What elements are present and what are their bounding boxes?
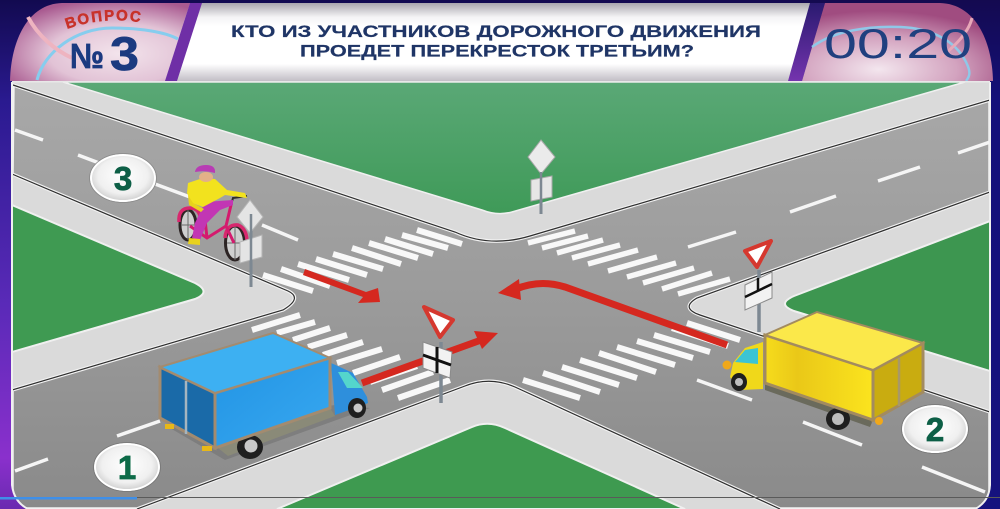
cab <box>730 342 763 390</box>
face <box>199 172 213 182</box>
label: participant 2 <box>902 404 968 454</box>
grass: top <box>63 82 965 214</box>
headlight <box>722 360 732 370</box>
slanted purple stripe right <box>788 3 825 81</box>
cargo box top <box>160 333 330 393</box>
question line 2: ПРОЕДЕТ ПЕРЕКРЕСТОК ТРЕТЬИМ? <box>300 42 694 60</box>
vehicle: cyclist <box>179 165 247 260</box>
rear lights <box>165 424 212 451</box>
truck 1: blue <box>160 333 370 460</box>
front wheel <box>731 373 747 391</box>
windshield <box>338 372 363 388</box>
label: participant 2: 2 <box>926 411 944 448</box>
label: ВОПРОС arc: ВОПРОС <box>64 10 141 29</box>
question number: 3 <box>110 27 139 80</box>
video progress bar <box>0 497 1000 500</box>
panel: question number <box>10 3 190 81</box>
crosswalk: road 3 <box>263 230 462 291</box>
label: participant 3: 3 <box>114 160 132 197</box>
helmet <box>195 165 215 173</box>
question number: № <box>70 37 104 76</box>
yield triangle <box>745 241 771 267</box>
cargo box rear <box>160 367 215 448</box>
rear wheel <box>180 210 196 240</box>
grass: bottom <box>277 424 685 509</box>
top edge of scene <box>12 81 990 82</box>
mudguards <box>179 208 200 222</box>
question line 1: КТО ИЗ УЧАСТНИКОВ ДОРОЖНОГО ДВИЖЕНИЯ <box>231 23 761 41</box>
panel: question text <box>165 3 815 81</box>
chassis <box>765 384 873 427</box>
label: participant 3 <box>90 154 156 202</box>
arrow: truck 1 straight <box>362 331 498 383</box>
front wheel <box>348 398 366 418</box>
sign: top priority sign <box>528 140 555 214</box>
cab <box>331 363 368 415</box>
bike frame <box>190 205 234 243</box>
jersey <box>187 178 247 207</box>
cargo box side <box>765 335 873 420</box>
rear wheel <box>826 408 850 430</box>
sign: yield with plate, right <box>745 241 772 332</box>
cargo box top <box>765 312 923 370</box>
shoe <box>188 238 200 245</box>
windshield <box>735 348 758 364</box>
rear light <box>875 417 883 425</box>
label: participant 1 <box>94 442 160 492</box>
header band <box>10 3 993 81</box>
arrow: cyclist direction <box>303 269 380 303</box>
lane markings <box>15 130 990 492</box>
crosswalk: road 2 <box>523 323 740 398</box>
handlebar <box>231 195 248 202</box>
cargo box rear <box>873 343 923 420</box>
crosswalk: upper right road <box>528 231 730 294</box>
rear wheel <box>237 435 263 459</box>
grass: left <box>12 205 204 352</box>
direction plate <box>745 272 772 310</box>
arrow: truck 2 turning left <box>498 279 727 345</box>
grass: right <box>785 221 990 371</box>
label: participant 1: 1 <box>118 449 136 486</box>
direction plate <box>423 342 452 378</box>
cargo box side <box>215 358 330 448</box>
timer readout: 00:20 <box>824 20 972 67</box>
sign: yield with plate, left <box>423 307 453 403</box>
truck 2: yellow <box>722 312 923 430</box>
crosswalk: road 1 <box>252 315 450 398</box>
panel: timer <box>802 3 993 81</box>
arm <box>188 195 204 212</box>
front wheel <box>226 226 244 260</box>
yield triangle <box>424 307 453 337</box>
slanted purple stripe left <box>165 3 202 81</box>
chassis <box>218 408 335 456</box>
legs <box>192 200 233 240</box>
sign: priority road near cyclist <box>237 200 263 287</box>
shadow <box>170 405 370 460</box>
